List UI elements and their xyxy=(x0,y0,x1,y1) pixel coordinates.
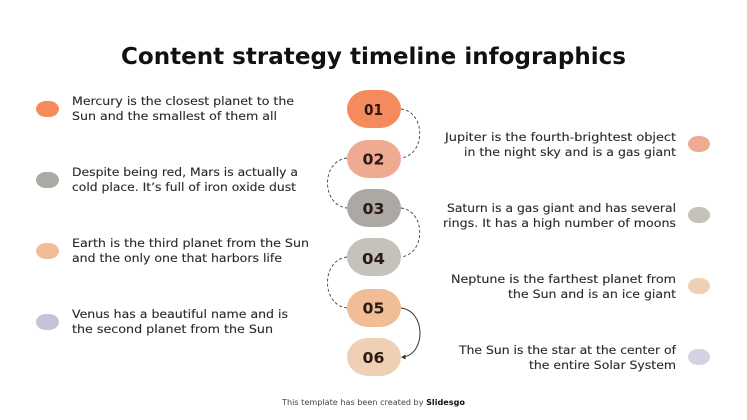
text: Mars description: cold place. It’s full of iron oxide dust xyxy=(72,180,297,194)
arrow: 04 to 05 dashed connector xyxy=(328,257,347,308)
text: Jupiter description: in the night sky and is a gas giant xyxy=(464,145,677,159)
left item: Mercury xyxy=(36,94,294,123)
icon: Mars colour dot xyxy=(36,172,59,188)
step 02 pill xyxy=(347,140,401,178)
text: Mercury description: Mercury is the closest planet to the xyxy=(72,94,294,108)
text: Neptune description xyxy=(451,272,677,301)
step 01 pill xyxy=(347,90,401,128)
step 04 pill xyxy=(347,238,401,276)
arrow: 05 to 06 solid connector xyxy=(401,308,420,360)
icon: Venus colour dot xyxy=(36,314,59,330)
text: Neptune description: Neptune is the farthest planet from xyxy=(451,272,676,286)
text: Saturn description: Saturn is a gas giant and has several xyxy=(447,201,676,215)
text: Saturn description xyxy=(443,201,676,230)
text: Mars description: Despite being red, Mars is actually a xyxy=(72,165,298,179)
text: Jupiter description xyxy=(444,130,677,159)
right item: Sun xyxy=(458,343,710,372)
arrow: 02 to 03 dashed connector xyxy=(328,158,347,208)
text: Earth description xyxy=(72,236,309,265)
arrow: 03 to 04 dashed connector xyxy=(401,208,420,257)
text: Sun description xyxy=(458,343,677,372)
step 05 pill xyxy=(347,289,401,327)
step 06 pill xyxy=(347,338,401,376)
left item: Earth xyxy=(36,236,309,265)
text: Venus description xyxy=(72,307,288,336)
right item: Jupiter xyxy=(444,130,710,159)
text: Earth description: and the only one that harbors life xyxy=(72,251,282,265)
step 02 pill: 02 xyxy=(362,150,384,168)
step 05 pill: 05 xyxy=(362,300,384,318)
icon: Sun colour dot xyxy=(688,349,710,365)
text: Venus description: Venus has a beautiful name and is xyxy=(72,307,288,321)
text: Mars description xyxy=(72,165,298,194)
step 03 pill: 03 xyxy=(362,200,384,218)
arrow: 01 to 02 dashed connector xyxy=(401,109,420,158)
text: Mercury description xyxy=(72,94,294,123)
text: Mercury description: Sun and the smallest of them all xyxy=(72,109,277,123)
right item: Saturn xyxy=(443,201,710,230)
timeline connectors xyxy=(328,109,420,360)
text: Venus description: the second planet from the Sun xyxy=(72,322,273,336)
icon: Mercury colour dot xyxy=(36,101,59,117)
title: Content strategy timeline infographics xyxy=(121,42,626,70)
step 03 pill xyxy=(347,189,401,227)
text: Neptune description: the Sun and is an ice giant xyxy=(508,287,677,301)
step 01 pill: 01 xyxy=(364,101,383,119)
left item: Venus xyxy=(36,307,288,336)
text: Earth description: Earth is the third planet from the Sun xyxy=(72,236,309,250)
icon: Jupiter colour dot xyxy=(688,136,710,152)
footer credit: This template has been created by Slidesgo xyxy=(281,398,465,407)
text: Sun description: the entire Solar System xyxy=(529,358,676,372)
step 06 pill: 06 xyxy=(362,349,384,367)
icon: Saturn colour dot xyxy=(688,207,710,223)
text: Jupiter description: Jupiter is the fourth-brightest object xyxy=(444,130,677,144)
text: Sun description: The Sun is the star at the center of xyxy=(458,343,677,357)
step 04 pill: 04 xyxy=(362,250,385,268)
icon: Earth colour dot xyxy=(36,243,59,259)
left item: Mars xyxy=(36,165,298,194)
icon: Neptune colour dot xyxy=(688,278,710,294)
right item: Neptune xyxy=(451,272,710,301)
text: Saturn description: rings. It has a high number of moons xyxy=(443,216,676,230)
